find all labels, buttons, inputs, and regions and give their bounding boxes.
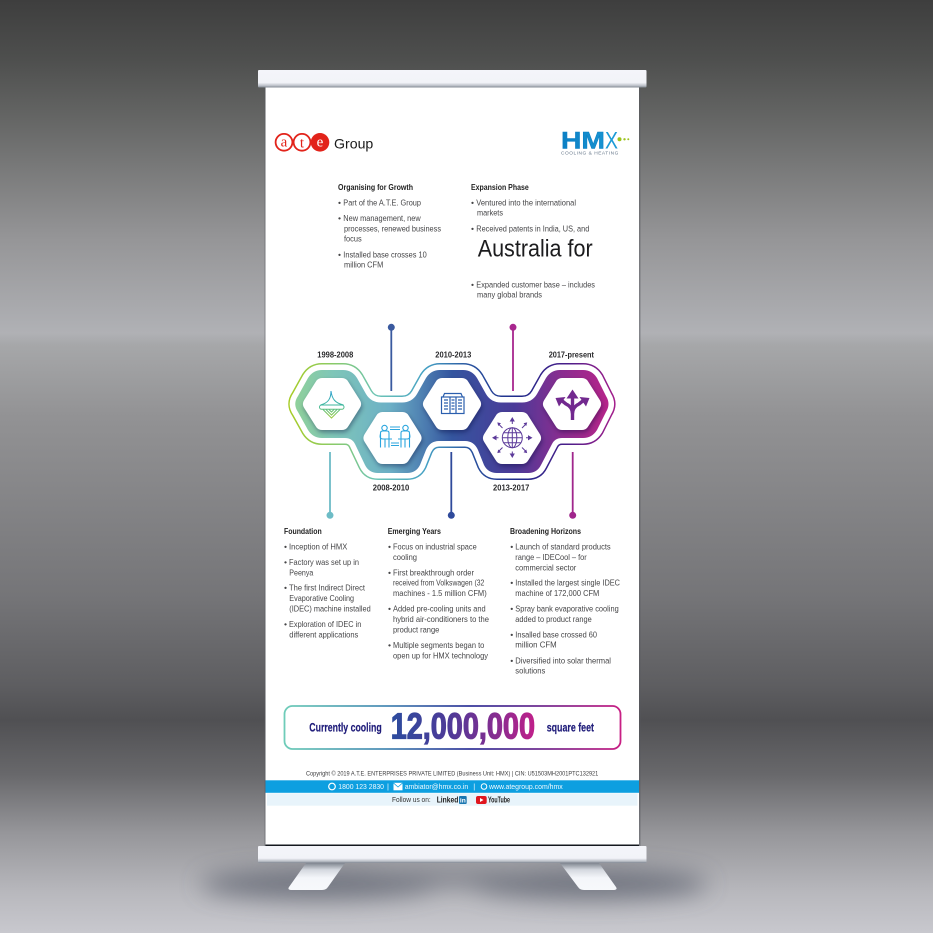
contact bar: 1800 123 2830 xyxy=(338,782,384,791)
text block: broadening horizons: Broadening Horizons xyxy=(510,526,581,536)
text block: foundation: • xyxy=(284,619,287,629)
text block: expansion phase: • xyxy=(471,279,474,289)
text block: broadening horizons: Insalled base crossed 60 xyxy=(515,629,597,639)
contact bar: www.ategroup.com/hmx xyxy=(488,782,563,791)
text block: foundation xyxy=(284,526,371,639)
text block: emerging years: Focus on industrial space xyxy=(393,542,477,552)
text block: foundation: The first Indirect Direct xyxy=(289,583,366,593)
stem: organising for growth xyxy=(388,324,395,391)
text block: emerging years xyxy=(388,526,489,660)
contact bar: ambiator@hmx.co.in xyxy=(405,782,468,791)
text block: expansion phase: Ventured into the international xyxy=(476,198,576,208)
text block: foundation: Inception of HMX xyxy=(289,542,348,552)
white gap ribbon xyxy=(295,370,608,473)
text block: broadening horizons: • xyxy=(510,655,513,665)
text block: organising for growth: million CFM xyxy=(344,259,383,269)
logo: hmx xyxy=(561,127,629,157)
text block: broadening horizons: • xyxy=(510,578,513,588)
text block: organising for growth: focus xyxy=(344,234,362,244)
stem: foundation xyxy=(326,452,334,519)
text block: broadening horizons: commercial sector xyxy=(515,562,576,572)
stem: emerging years xyxy=(448,452,455,519)
stem: expansion phase xyxy=(510,324,516,391)
text block: emerging years: Added pre-cooling units and xyxy=(393,604,486,614)
year labels: 2017-present xyxy=(549,349,594,359)
right foot xyxy=(560,863,617,890)
year labels: 2010-2013 xyxy=(435,349,471,359)
text block: broadening horizons: million CFM xyxy=(515,640,557,650)
bottom base bar xyxy=(258,846,646,863)
year labels: 1998-2008 xyxy=(317,349,353,359)
text block: foundation: Exploration of IDEC in xyxy=(289,619,361,629)
callout: currently cooling: Currently cooling xyxy=(309,723,382,735)
text block: foundation: Foundation xyxy=(284,526,322,536)
floor shadow xyxy=(200,869,708,899)
logo: ate group: t xyxy=(300,135,305,151)
white hexagons xyxy=(310,385,594,457)
year labels xyxy=(317,349,594,493)
logo: hmx: X xyxy=(605,127,618,154)
coloured band xyxy=(295,370,608,473)
text block: emerging years: • xyxy=(388,604,391,614)
text block: emerging years: open up for HMX technology xyxy=(393,650,489,660)
social bar: in xyxy=(460,798,466,805)
text block: organising for growth: New management, new xyxy=(343,213,421,223)
text block: broadening horizons: Spray bank evaporative cooling xyxy=(515,604,619,614)
icon: diverging arrows xyxy=(556,390,590,420)
text block: foundation: different applications xyxy=(289,629,358,639)
text block: foundation: Factory was set up in xyxy=(289,557,359,567)
text block: broadening horizons: range – IDECool – for xyxy=(515,552,587,562)
text block: organising for growth: Organising for Growth xyxy=(338,182,413,192)
text block: foundation: • xyxy=(284,542,287,552)
text block: foundation: • xyxy=(284,583,287,593)
callout: currently cooling xyxy=(284,705,620,749)
text block: expansion phase: markets xyxy=(477,208,503,218)
text block: expansion phase: Expansion Phase xyxy=(471,182,529,192)
text block: organising for growth: processes, renewed business xyxy=(344,224,441,234)
text block: foundation: • xyxy=(284,557,287,567)
text block: broadening horizons: Installed the largest single IDEC xyxy=(515,578,620,588)
logo: hmx: HM xyxy=(561,127,605,154)
contact bar: | xyxy=(387,782,389,791)
text block: broadening horizons: • xyxy=(510,542,513,552)
logo: ate group: Group xyxy=(334,136,374,152)
text block: organising for growth: • xyxy=(338,198,341,208)
text block: emerging years: Emerging Years xyxy=(388,526,441,536)
text block: foundation: Evaporative Cooling xyxy=(289,593,354,603)
text block: emerging years: product range xyxy=(393,624,439,634)
text block: expansion phase: Expanded customer base – includes xyxy=(476,279,595,289)
text block: organising for growth xyxy=(338,182,441,269)
text block: broadening horizons: added to product range xyxy=(515,614,592,624)
text block: emerging years: cooling xyxy=(393,552,417,562)
text block: broadening horizons xyxy=(510,526,620,676)
icon: cooling unit xyxy=(442,394,464,414)
social bar: Follow us on: xyxy=(392,797,431,804)
outer outline ribbon xyxy=(295,370,608,473)
text block: broadening horizons: • xyxy=(510,629,513,639)
banner sheet xyxy=(264,84,640,848)
text block: organising for growth: Installed base crosses 10 xyxy=(343,249,427,259)
contact bar: | xyxy=(473,782,475,791)
copyright: Copyright © 2019 A.T.E. ENTERPRISES PRIVATE LIMITED (Business Unit: HMX) | CIN: U51503MH2001PTC132921 xyxy=(306,771,599,778)
text block: expansion phase: • xyxy=(471,198,474,208)
text block: emerging years: Multiple segments began to xyxy=(393,640,484,650)
callout: currently cooling: square feet xyxy=(547,723,594,735)
text block: emerging years: • xyxy=(388,567,391,577)
text block: broadening horizons: Diversified into solar thermal xyxy=(515,655,611,665)
timeline diagram xyxy=(295,324,608,519)
icon: globe with arrows xyxy=(493,418,532,457)
text block: emerging years: machines - 1.5 million CFM) xyxy=(393,588,487,598)
social bar xyxy=(267,793,638,806)
icon: spinning top xyxy=(320,391,344,418)
text block: broadening horizons: • xyxy=(510,604,513,614)
text block: organising for growth: • xyxy=(338,213,341,223)
year labels: 2008-2010 xyxy=(373,483,409,493)
text block: foundation: (IDEC) machine installed xyxy=(289,603,371,613)
social bar: Linked xyxy=(437,795,458,804)
text block: organising for growth: • xyxy=(338,249,341,259)
text block: emerging years: • xyxy=(388,542,391,552)
text block: broadening horizons: machine of 172,000 CFM xyxy=(515,588,599,598)
text block: expansion phase: Received patents in India, US, and xyxy=(476,223,589,233)
text block: foundation: Peenya xyxy=(289,567,313,577)
year labels: 2013-2017 xyxy=(493,483,529,493)
text block: expansion phase: • xyxy=(471,223,474,233)
text block: emerging years: • xyxy=(388,640,391,650)
logo: ate group: a xyxy=(281,134,288,150)
social bar: YouTube xyxy=(488,795,510,805)
logo: ate group: e xyxy=(317,134,324,150)
icon: people xyxy=(380,425,410,448)
logo: ate group xyxy=(276,133,374,152)
text block: organising for growth: Part of the A.T.E. Group xyxy=(343,198,421,208)
text block: expansion phase xyxy=(471,182,595,300)
left foot xyxy=(288,863,345,890)
text block: broadening horizons: solutions xyxy=(515,666,545,676)
contact bar xyxy=(266,780,639,793)
text block: expansion phase: Australia for xyxy=(478,236,593,263)
logo: hmx: COOLING & HEATING xyxy=(561,151,619,157)
text block: expansion phase: many global brands xyxy=(477,290,542,300)
text block: broadening horizons: Launch of standard products xyxy=(515,542,611,552)
stem: broadening horizons xyxy=(569,452,576,519)
text block: emerging years: hybrid air-conditioners to the xyxy=(393,614,489,624)
top roller bar xyxy=(258,70,646,88)
text block: emerging years: First breakthrough order xyxy=(393,567,474,577)
callout: currently cooling: 12,000,000 xyxy=(391,705,535,746)
text block: emerging years: received from Volkswagen (32 xyxy=(393,578,484,588)
